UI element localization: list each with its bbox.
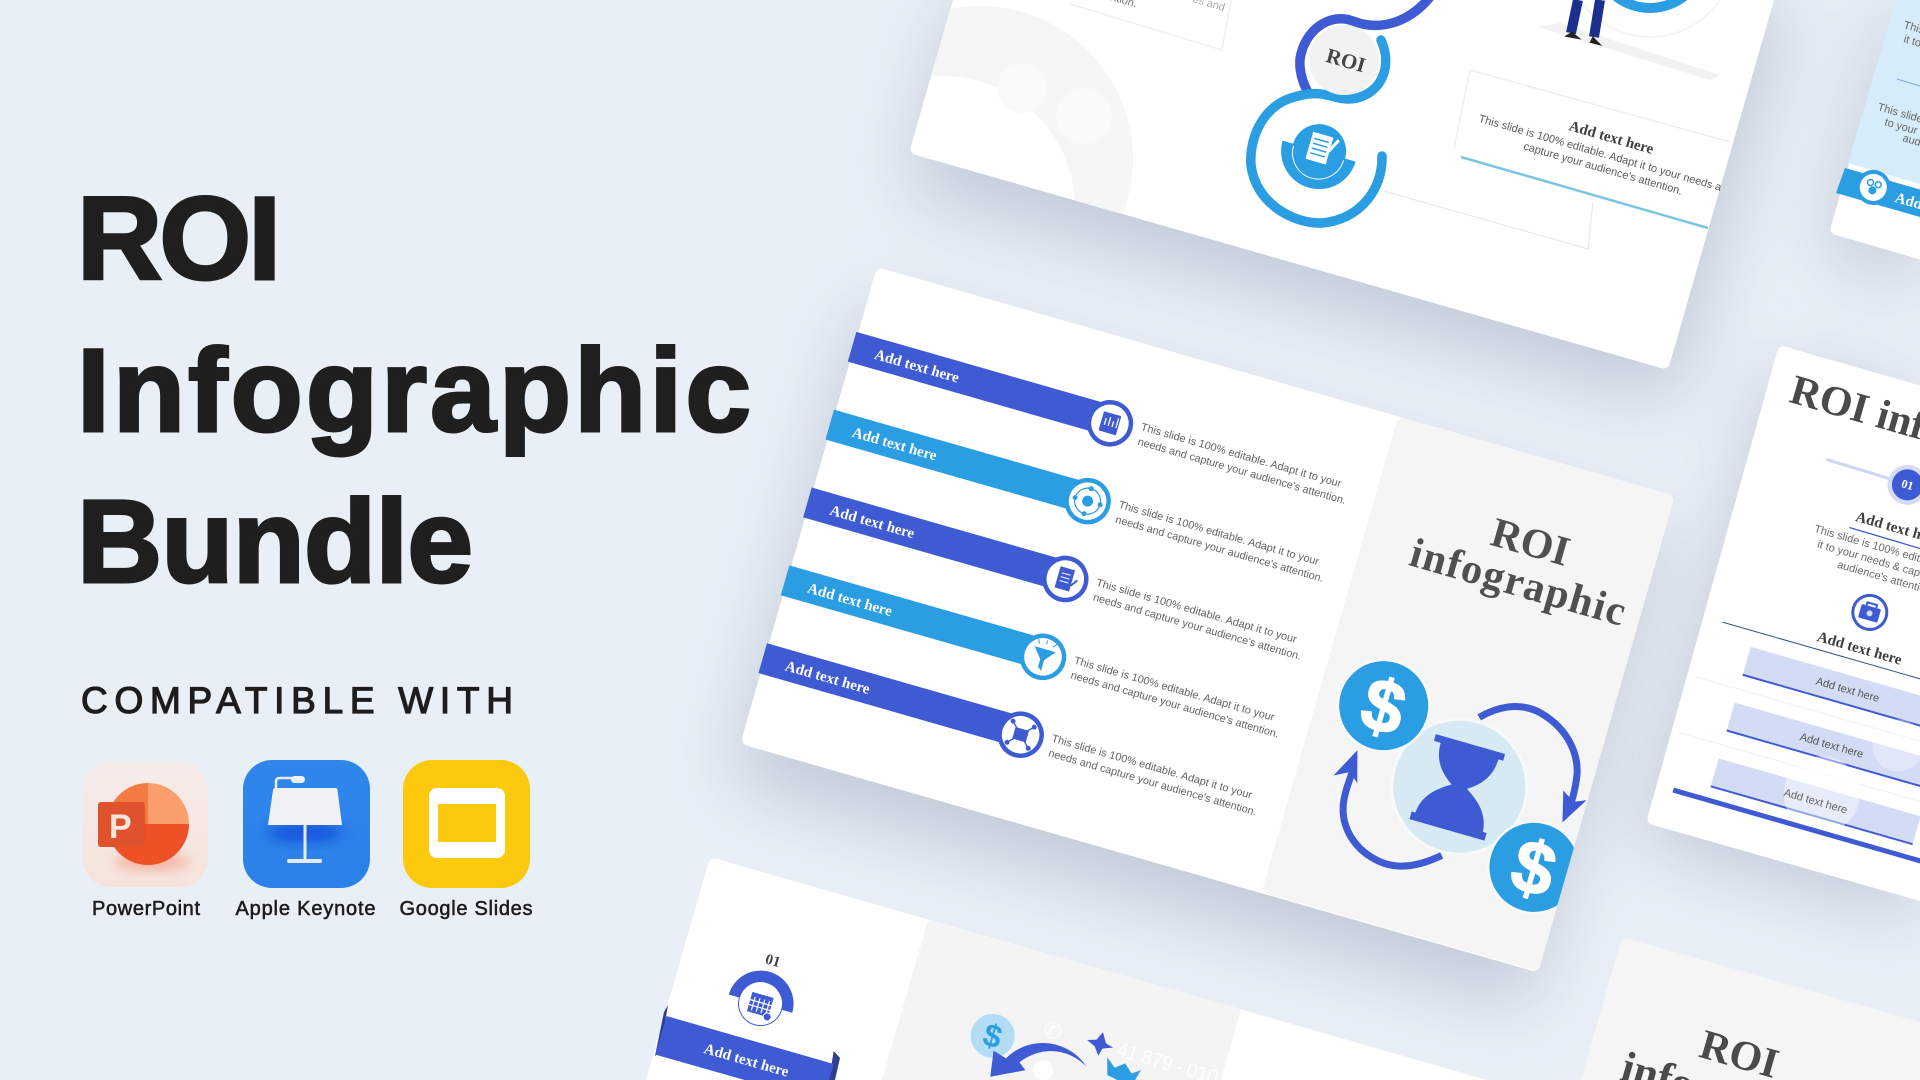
row 1 [846,329,1354,512]
arrow: clockwise bottom [1334,750,1444,870]
top slide contents [723,0,1782,425]
option bar 2 [1727,703,1920,788]
title: ROI [1486,510,1575,576]
row 3: This slide is 100% editable. Adapt it to your [1095,577,1298,646]
icon: dollar coin upper: $ [1352,661,1415,752]
bottom slide contents [655,928,1221,1080]
title [1405,490,1642,636]
text box with light-blue rule: capture your audience's attention. [1522,141,1684,198]
hub circle [1374,701,1545,872]
option bar 2: Add text here [1798,731,1865,761]
icon: dollar coin lower: $ [1503,822,1565,913]
icon: dollar coin upper [1339,661,1428,750]
step 01 marker [1820,442,1920,510]
ROI badge [1309,25,1379,95]
blue ribbon [655,1016,834,1080]
row 3 [801,485,1309,668]
row 4: Add text here [806,581,894,620]
icon: PowerPoint: P [109,808,132,846]
slide: right ROI infographic [1648,347,1920,901]
icon: dollar coin [965,1009,1020,1063]
row 1: Add text here [873,347,961,387]
icon: dollar coin: $ [979,1016,1006,1056]
option bar 1 [1743,647,1920,733]
option bar 3: Add text here [1782,787,1849,817]
ROI badge: ROI [1324,43,1368,77]
slide: top right [1831,0,1920,260]
icon: network [1004,718,1037,751]
slide: bottom left [646,859,1487,1080]
light-blue panel [1848,0,1920,184]
compatible with label: COMPATIBLE WITH [81,680,513,721]
icon: document [1055,566,1080,593]
step 01 marker: 01 [1900,476,1915,493]
app labels [92,898,532,920]
bottom right title [1616,1003,1784,1080]
option bar 3 [1707,674,1920,859]
row 4: needs and capture your audience's attention. [1069,670,1280,741]
app labels: Google Slides [400,898,532,920]
row 4: This slide is 100% editable. Adapt it to your [1072,655,1276,724]
step description [1805,523,1920,607]
icon: money bag [1101,1057,1142,1080]
ribbon label: Add text here [702,1041,791,1080]
step number: 01 [763,952,782,971]
right grey panel [1262,416,1675,972]
icon: clipboard bowl [1272,115,1363,198]
heading: Infographic [77,325,751,457]
heading: Bundle [77,476,473,608]
icon: Google Slides [403,760,530,888]
icon: calendar badge [723,963,801,1034]
ROI cycle illustration [1334,661,1586,912]
app labels: Apple Keynote [236,898,376,920]
icon: PowerPoint [83,762,208,887]
snake path [1251,0,1430,223]
top right slide copy [1876,19,1920,149]
right slide contents [1662,363,1920,874]
icon: funnel [1029,637,1058,673]
person and ground shadow [1538,0,1735,80]
row 4 [779,563,1287,745]
option bar 1: Add text here [1814,675,1881,705]
row 3: Add text here [828,503,916,542]
curved arrow [986,1029,1090,1080]
row 5: needs and capture your audience's attention. [1047,747,1258,818]
row 2: Add text here [850,425,939,464]
slide: bottom right [1581,939,1920,1080]
slide shadows [730,0,1920,1008]
bottom slide grey panel [882,920,1241,1080]
row 5: Add text here [783,659,872,698]
row 3: needs and capture your audience's attention. [1092,592,1303,663]
icon: briefcase [1849,591,1891,633]
app labels: PowerPoint [92,898,200,920]
blue label bar [1836,168,1920,217]
row 5 [756,640,1265,823]
title: infographic [1405,530,1631,636]
icon: report [1099,411,1121,435]
contact details [1030,1016,1221,1080]
row 1: needs and capture your audience's attention. [1136,436,1347,507]
icon: coin orbit [1069,483,1106,520]
icon: hourglass [1409,734,1509,841]
decorative ring [932,6,1133,214]
text box with light-blue rule [1384,70,1730,250]
ribbon ends [655,1005,840,1080]
row 2: needs and capture your audience's attention. [1114,514,1325,585]
row 5: This slide is 100% editable. Adapt it to your [1050,733,1254,802]
icon: small plane [1084,1029,1116,1059]
row 2: This slide is 100% editable. Adapt it to your [1117,499,1321,568]
text box with light-blue rule: Add text here [1567,118,1656,158]
heading: ROI [77,173,281,305]
slide: top journey [911,0,1774,368]
icon: Keynote [243,760,370,888]
text box with light-blue rule: This slide is 100% editable. Adapt it to your needs and [1477,113,1734,197]
subheading: Add text here [1815,629,1904,669]
slide: main ROI infographic [738,266,1688,976]
row 2 [823,407,1332,590]
upper-left text box [1070,0,1231,50]
bottom rule [1673,790,1920,867]
arrow: clockwise top [1477,703,1586,822]
contact details: ✆ [1040,1016,1065,1045]
heading [77,173,751,608]
row 1: This slide is 100% editable. Adapt it to your [1139,421,1343,490]
icon: bulb network [1854,168,1892,207]
